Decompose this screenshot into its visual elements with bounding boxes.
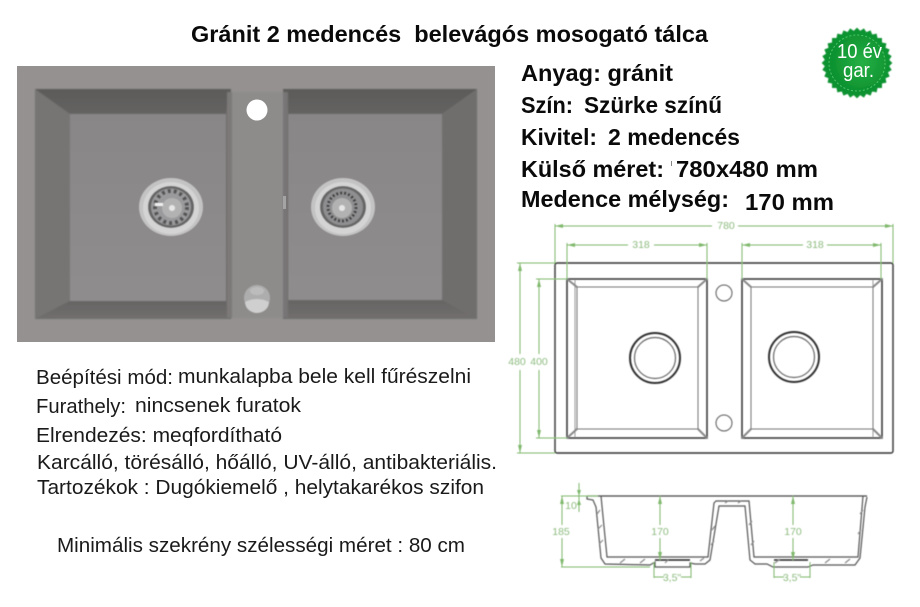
dimensions: section: 10 xyxy=(565,500,577,512)
installation and features text: nincsenek furatok xyxy=(135,395,302,417)
dimensions: section: 170 xyxy=(784,526,802,538)
technical drawing: top view xyxy=(508,220,893,453)
outer outline xyxy=(555,263,893,453)
divider holes xyxy=(716,285,732,431)
installation and features text: Tartozékok : Dugókiemelő , helytakarékos szifon xyxy=(37,477,484,499)
central divider xyxy=(227,92,288,318)
specifications list: Szürke színű xyxy=(584,92,722,118)
dimensions: section: 185 xyxy=(552,526,570,538)
installation and features text: Karcálló, törésálló, hőálló, UV-álló, antibakteriális. xyxy=(37,452,497,474)
dimensions: height: 480 xyxy=(508,356,526,368)
badge: 10 év garancia xyxy=(822,28,892,98)
installation and features text: Beépítési mód: xyxy=(36,367,173,389)
specifications list: 170 mm xyxy=(745,189,834,215)
installation and features text: Furathely: xyxy=(36,396,126,418)
left bowl outline xyxy=(567,279,707,438)
installation and features text: munkalapba bele kell fűrészelni xyxy=(178,366,471,388)
left bowl xyxy=(35,89,231,319)
badge: 10 év garancia: gar. xyxy=(843,60,874,82)
badge: 10 év garancia: 10 év xyxy=(837,41,882,63)
installation and features text: Elrendezés: meqfordítható xyxy=(36,425,282,447)
drain circles xyxy=(630,332,819,383)
installation and features text xyxy=(36,366,497,499)
dimensions: section xyxy=(552,483,810,584)
photo: granite sink top view xyxy=(17,66,495,342)
minimum cabinet width note: Minimális szekrény szélességi méret : 80 cm xyxy=(57,535,465,557)
specifications list: Külső méret: xyxy=(521,156,664,182)
specifications list: 2 medencés xyxy=(608,124,740,150)
right drain xyxy=(311,178,375,236)
specifications list: Szín: xyxy=(521,92,573,118)
specifications list xyxy=(521,60,834,215)
dimensions: height xyxy=(508,263,567,453)
pop-up button xyxy=(244,285,270,313)
left drain xyxy=(139,178,203,236)
specifications list: 780x480 mm xyxy=(676,156,818,182)
dimensions: height: 400 xyxy=(530,356,548,368)
technical drawing: cross-section xyxy=(552,483,867,584)
side clip xyxy=(283,196,286,209)
dimensions: width xyxy=(555,220,893,279)
dimensions: section: 3,5" xyxy=(783,572,801,584)
dimensions: width: 318 xyxy=(806,239,824,251)
dimensions: section: 170 xyxy=(651,526,669,538)
specifications list: Kivitel: xyxy=(521,124,597,150)
dimensions: width: 780 xyxy=(717,220,735,232)
dimensions: section: 3,5" xyxy=(663,572,681,584)
title: Gránit 2 medencés belevágós mosogató tálca xyxy=(191,21,708,47)
specifications list: Anyag: gránit xyxy=(521,60,673,86)
right bowl xyxy=(283,89,477,319)
overflow hole xyxy=(246,100,268,120)
right bowl outline xyxy=(742,279,882,438)
specifications list: Medence mélység: xyxy=(521,186,729,212)
dimensions: width: 318 xyxy=(632,239,650,251)
sink frame xyxy=(17,66,495,342)
section outline xyxy=(587,496,867,567)
